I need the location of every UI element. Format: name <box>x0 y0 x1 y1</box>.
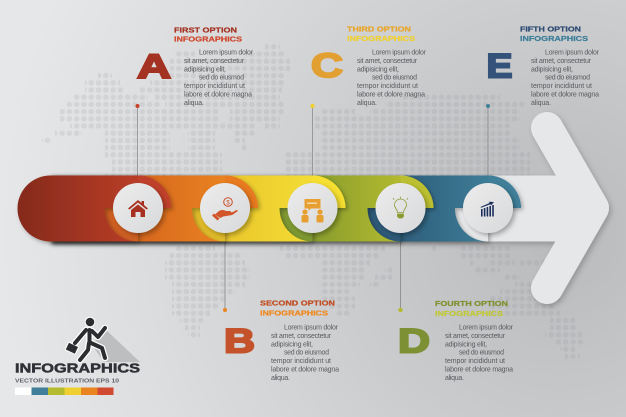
body text B: labore et dolore magna <box>271 366 339 374</box>
icon circle: bar chart <box>463 183 513 233</box>
logo <box>15 317 140 395</box>
icon: house <box>128 200 148 217</box>
body text C: sit amet, consectetur <box>357 58 418 65</box>
heading D <box>435 299 508 318</box>
body text E: aliqua. <box>531 100 551 107</box>
body text D: labore et dolore magna <box>445 366 513 374</box>
body text D <box>445 324 514 382</box>
heading A <box>174 26 242 44</box>
body text A: labore et dolore magna <box>184 92 252 98</box>
body text D: aliqua. <box>445 375 464 382</box>
block C <box>311 24 427 107</box>
body text A: Lorem ipsum dolor <box>199 50 254 56</box>
body text B: sed do eiusmod <box>284 350 329 356</box>
body text A: sed do eiusmod <box>199 74 244 82</box>
icon: coin over hand: $ <box>226 200 230 206</box>
body text A <box>184 50 254 107</box>
body text C: tempor incididunt ut <box>357 83 418 90</box>
heading B: SECOND OPTION <box>260 298 335 308</box>
body text C: labore et dolore magna <box>357 92 425 98</box>
letter E: E <box>486 48 512 86</box>
block D <box>398 299 514 382</box>
body text B: tempor incididunt ut <box>271 358 331 365</box>
body text B: adipisicing elit, <box>271 342 313 348</box>
icon: rising bars <box>480 202 494 216</box>
heading D: FOURTH OPTION <box>435 299 508 308</box>
logo title: INFOGRAPHICS <box>15 360 140 376</box>
letter B: B <box>224 322 255 360</box>
icon circle: home <box>113 183 163 233</box>
body text C: aliqua. <box>357 100 377 107</box>
body text D: adipisicing elit, <box>445 342 487 348</box>
icon: two people and speech bubble <box>302 199 324 222</box>
icon circle: money hand <box>200 183 250 233</box>
heading A: INFOGRAPHICS <box>174 34 242 44</box>
body text A: adipisicing elit, <box>184 66 226 74</box>
heading D: INFOGRAPHICS <box>435 309 503 318</box>
body text E: labore et dolore magna <box>531 92 599 98</box>
heading C: INFOGRAPHICS <box>347 34 415 43</box>
body text B <box>271 324 339 382</box>
icon circle: light bulb <box>376 183 426 233</box>
arrow <box>50 128 593 288</box>
body text E: adipisicing elit, <box>531 66 573 74</box>
runner figure <box>66 317 105 360</box>
body text A: sit amet, consectetur <box>184 58 245 65</box>
heading C <box>347 24 415 43</box>
connector lines and dots <box>136 104 490 312</box>
body text B: aliqua. <box>271 375 290 382</box>
heading E: FIFTH OPTION <box>520 24 581 34</box>
heading E: INFOGRAPHICS <box>520 34 588 43</box>
body text A: tempor incididunt ut <box>184 83 245 90</box>
heading B <box>260 298 335 318</box>
runner long shadow <box>92 328 140 362</box>
logo subtitle: VECTOR ILLUSTRATION EPS 10 <box>15 378 119 384</box>
block B <box>224 298 339 382</box>
heading C: THIRD OPTION <box>347 24 411 34</box>
body text D: sed do eiusmod <box>459 350 504 356</box>
block E <box>486 24 600 107</box>
heading B: INFOGRAPHICS <box>260 308 328 318</box>
letter D: D <box>398 322 430 360</box>
body text E: tempor incididunt ut <box>531 83 592 90</box>
heading E <box>520 24 588 43</box>
letter C: C <box>311 47 343 85</box>
icon: bulb <box>393 196 408 218</box>
body text D: Lorem ipsum dolor <box>459 324 514 332</box>
band segments <box>18 175 521 242</box>
body text C <box>357 50 427 107</box>
colour strip <box>15 388 114 395</box>
body text B: sit amet, consectetur <box>271 333 332 340</box>
segment: yellow <box>50 175 346 242</box>
letter A: A <box>137 48 171 86</box>
body text D: sit amet, consectetur <box>445 333 506 340</box>
dotted world map <box>42 43 585 360</box>
body text B: Lorem ipsum dolor <box>284 324 339 332</box>
block A <box>137 26 254 107</box>
segment: olive <box>50 175 434 242</box>
body text E: Lorem ipsum dolor <box>545 50 600 56</box>
heading A: FIRST OPTION <box>174 26 237 34</box>
body text C: adipisicing elit, <box>357 66 399 74</box>
body text E <box>531 50 600 107</box>
segment: red <box>18 176 171 242</box>
body text E: sit amet, consectetur <box>531 58 592 65</box>
segment: teal <box>50 175 521 242</box>
body text C: Lorem ipsum dolor <box>372 50 427 56</box>
icon circle: discussion <box>288 183 338 233</box>
body text A: aliqua. <box>184 100 204 107</box>
body text D: tempor incididunt ut <box>445 358 505 365</box>
body text C: sed do eiusmod <box>372 74 417 82</box>
body text E: sed do eiusmod <box>545 74 590 82</box>
segment: orange <box>50 176 258 242</box>
